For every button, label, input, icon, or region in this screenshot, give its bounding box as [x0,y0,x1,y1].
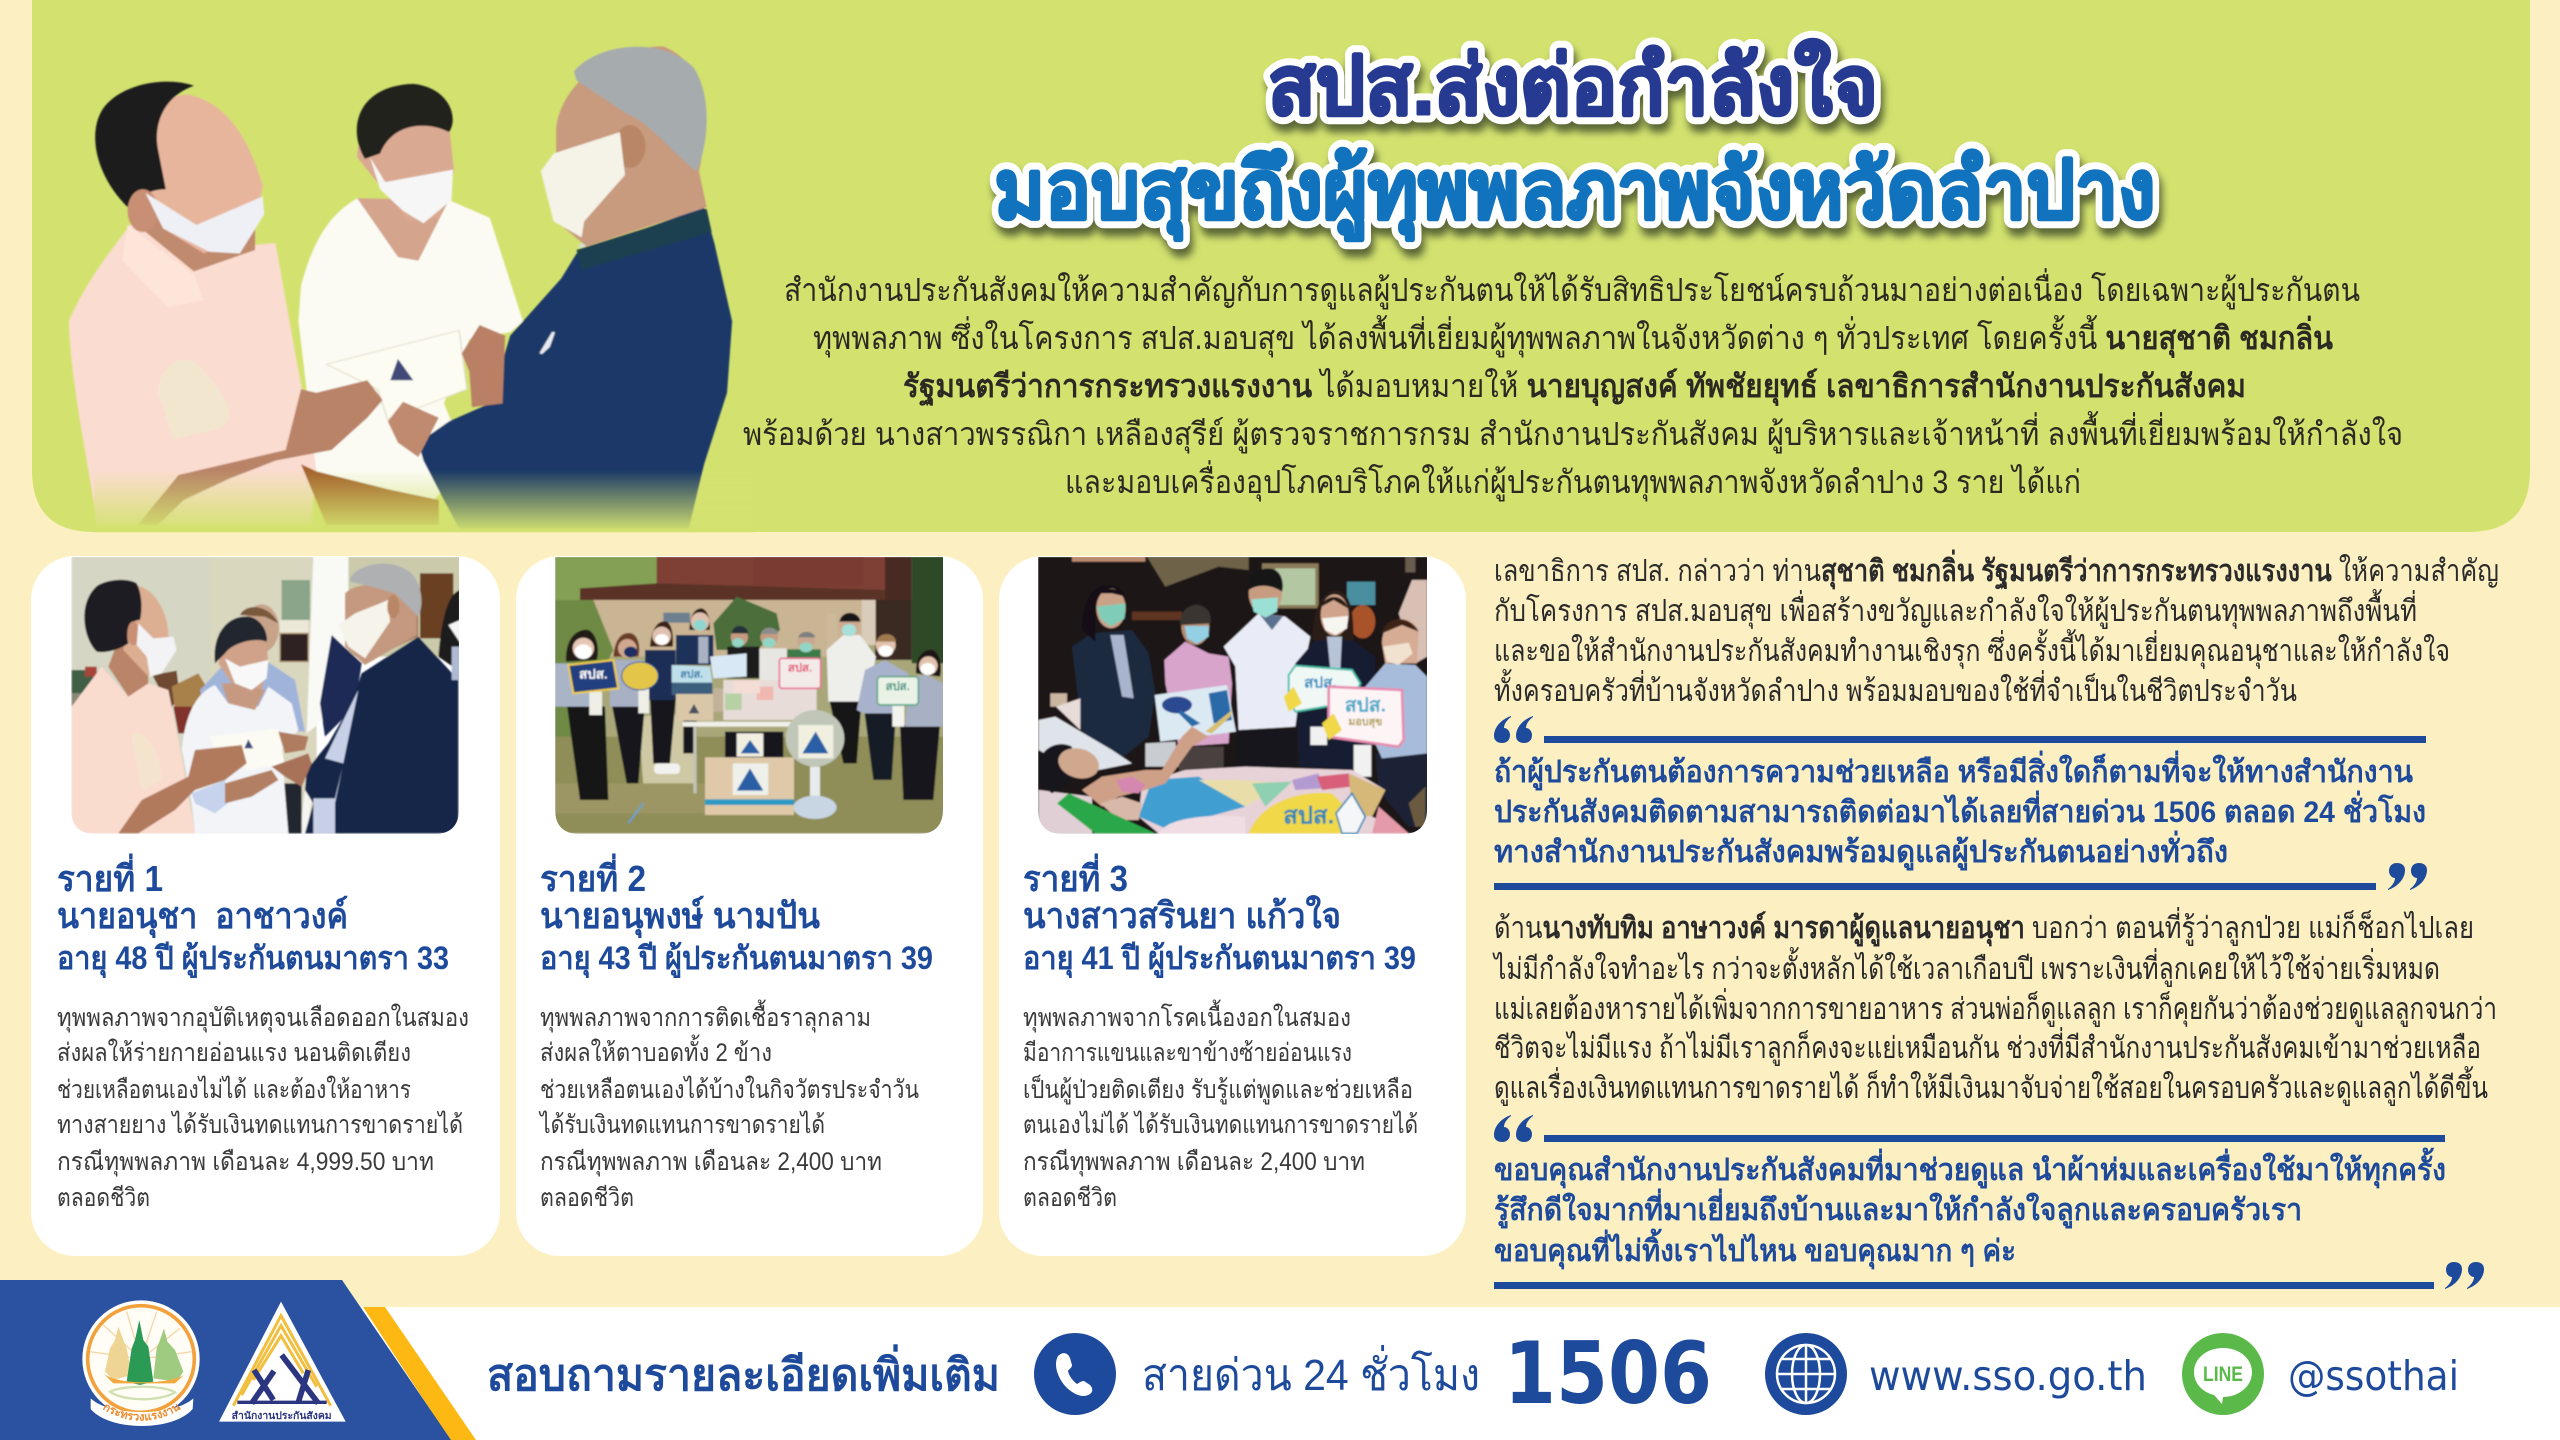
photo: case 2: สปส. [788,662,812,675]
case 3 description: ตลอดชีวิต [1023,1184,1117,1212]
photo: case 2: สปส. [579,666,608,681]
case 3 heading: รายที่ 3 [1023,853,1128,899]
icon: ministry of labour seal [82,1300,200,1426]
case 3 description: มีอาการแขนและขาข้างซ้ายอ่อนแรง [1023,1039,1352,1067]
icon: LINE [2182,1333,2264,1415]
case 2 description: ส่งผลให้ตาบอดทั้ง 2 ข้าง [540,1034,772,1067]
callout: quote 2: ขอบคุณที่ไม่ทิ้งเราไปไหน ขอบคุณมาก ๆ ค่ะ [1494,1228,2016,1270]
icon: ministry of labour seal: กระทรวงแรงงาน [102,1404,181,1421]
case 1 heading: รายที่ 1 [57,853,163,899]
case 2 description: ได้รับเงินทดแทนการขาดรายได้ [538,1110,825,1139]
case 2 heading: อายุ 43 ปี ผู้ประกันตนมาตรา 39 [540,940,933,979]
photo: case 2: สปส. [886,680,910,693]
intro paragraph: รัฐมนตรีว่าการกระทรวงแรงงาน ได้มอบหมายให้ นายบุญสงค์ ทัพชัยยุทธ์ เลขาธิการสำนักงานประกันสังคม [903,368,2246,407]
photo: case 3 [1038,557,1428,833]
intro paragraph [743,268,2403,502]
text block: secretary-general statement: ทั้งครอบครัวที่บ้านจังหวัดลำปาง พร้อมมอบของใช้ที่จำเป็นในชีวิตประจำวัน [1494,669,2297,708]
case 3 description: เป็นผู้ป่วยติดเตียง รับรู้แต่พูดและช่วยเหลือ [1023,1074,1413,1105]
photo: case 3: มอบสุข [1348,716,1382,729]
callout: quote 2 [1494,1115,2484,1289]
case 3 description: ทุพพลภาพจากโรคเนื้องอกในสมอง [1023,999,1351,1033]
case 2 description: ช่วยเหลือตนเองได้บ้างในกิจวัตรประจำวัน [540,1075,919,1104]
photo: case 3: สปส. [1283,802,1334,829]
callout: quote 1 [1494,716,2427,890]
callout: quote 2: รู้สึกดีใจมากที่มาเยี่ยมถึงบ้านและมาให้กำลังใจลูกและครอบครัวเรา [1494,1188,2302,1229]
photo: case 3: สปส. [1345,696,1386,717]
icon: globe [1765,1333,1847,1415]
icon: phone [1034,1333,1116,1415]
photo: case 2 [555,557,945,833]
panel: header [32,0,2530,532]
photo: case 3: สปส. [1304,674,1337,691]
case 2 heading: นายอนุพงษ์ นามปัน [540,895,820,939]
case 1 description [57,1003,469,1212]
case 3 description: ตนเองไม่ได้ ได้รับเงินทดแทนการขาดรายได้ [1023,1110,1418,1139]
hotline number: 1506 [1504,1324,1712,1424]
text block: secretary-general statement [1494,549,2499,708]
case 1 description: กรณีทุพพลภาพ เดือนละ 4,999.50 บาท [57,1148,434,1177]
panel: case 3 [999,556,1466,1256]
text block: secretary-general statement: เลขาธิการ สปส. กล่าวว่า ท่านสุชาติ ชมกลิ่น รัฐมนตรีว่าการกระทรวงแรงงาน ให้ความสำคัญ [1494,549,2499,591]
case 1 description: ทุพพลภาพจากอุบัติเหตุจนเลือดออกในสมอง [57,1003,469,1033]
case 2 description [538,999,919,1212]
title: มอบสุขถึงผู้ทุพพลภาพจังหวัดลำปาง [994,145,2156,241]
case 2 description: ทุพพลภาพจากการติดเชื้อราลุกลาม [540,999,871,1033]
case 1 description: ทางสายยาง ได้รับเงินทดแทนการขาดรายได้ [57,1110,463,1139]
case 3 heading: นางสาวสรินยา แก้วใจ [1023,894,1341,936]
icon: closing quote mark [2445,1262,2484,1289]
intro paragraph: ทุพพลภาพ ซึ่งในโครงการ สปส.มอบสุข ได้ลงพื้นที่เยี่ยมผู้ทุพพลภาพในจังหวัดต่าง ๆ ทั่วประเทศ โดยครั้งนี้ นายสุชาติ ชมกลิ่น [813,315,2333,359]
case 1 heading: นายอนุชา อาชาวงค์ [57,895,348,939]
title: สปส.ส่งต่อกำลังใจ [1268,39,1878,132]
text block: mother statement: ด้านนางทับทิม อาษาวงค์ มารดาผู้ดูแลนายอนุชา บอกว่า ตอนที่รู้ว่าลูกป่วย แม่ก็ช็อกไปเลย [1494,907,2474,947]
title: สปส.ส่งต่อกำลังใจ [1268,39,1878,132]
icon: social security office logo: สำนักงานประกันสังคม [232,1410,332,1422]
case 3 description [1023,999,1418,1212]
callout: quote 1: ประกันสังคมติดตามสามารถติดต่อมาได้เลยที่สายด่วน 1506 ตลอด 24 ชั่วโมง [1494,790,2426,829]
title [994,39,2156,241]
case 3 description: กรณีทุพพลภาพ เดือนละ 2,400 บาท [1023,1148,1365,1177]
contact heading: สอบถามรายละเอียดเพิ่มเติม [487,1344,1000,1400]
photo: case 2: สปส. [680,668,703,680]
case 1 description: ตลอดชีวิต [57,1184,150,1212]
intro paragraph: สำนักงานประกันสังคมให้ความสำคัญกับการดูแลผู้ประกันตนให้ได้รับสิทธิประโยชน์ครบถ้วนมาอย่างต่อเนื่อง โดยเฉพาะผู้ประกันตน [784,268,2360,310]
case 1 heading [57,853,449,979]
footer bar [0,1280,2560,1440]
case 3 heading [1023,853,1416,979]
icon: opening quote mark [1494,1115,1533,1142]
icon: social security office logo [219,1302,346,1422]
callout: quote 2: ขอบคุณสำนักงานประกันสังคมที่มาช่วยดูแล นำผ้าห่มและเครื่องใช้มาให้ทุกครั้ง [1494,1147,2446,1189]
LINE handle: @ssothai [2288,1352,2459,1400]
text block: mother statement [1492,907,2497,1106]
case 2 heading: รายที่ 2 [540,853,646,899]
callout: quote 1: ทางสำนักงานประกันสังคมพร้อมดูแลผู้ประกันตนอย่างทั่วถึง [1494,830,2228,871]
hotline label: สายด่วน 24 ชั่วโมง [1142,1344,1480,1400]
callout: quote 1: ถ้าผู้ประกันตนต้องการความช่วยเหลือ หรือมีสิ่งใดก็ตามที่จะให้ทางสำนักงาน [1494,750,2413,791]
website: www.sso.go.th [1869,1352,2147,1400]
case 3 heading: อายุ 41 ปี ผู้ประกันตนมาตรา 39 [1023,940,1416,979]
title: มอบสุขถึงผู้ทุพพลภาพจังหวัดลำปาง [994,145,2156,241]
case 1 heading: อายุ 48 ปี ผู้ประกันตนมาตรา 33 [57,940,449,979]
text block: secretary-general statement: กับโครงการ สปส.มอบสุข เพื่อสร้างขวัญและกำลังใจให้ผู้ประกันตนทุพพลภาพถึงพื้นที่ [1494,589,2417,630]
icon: LINE: LINE [2203,1363,2243,1386]
intro paragraph: พร้อมด้วย นางสาวพรรณิกา เหลืองสุรีย์ ผู้ตรวจราชการกรม สำนักงานประกันสังคม ผู้บริหารและเจ้าหน้าที่ ลงพื้นที่เยี่ยมพร้อมให้กำลังใจ [743,411,2403,454]
panel: case 1 [31,556,500,1256]
case 2 heading [540,853,933,979]
panel: case 2 [516,556,983,1256]
icon: closing quote mark [2388,863,2427,890]
intro paragraph: และมอบเครื่องอุปโภคบริโภคให้แก่ผู้ประกันตนทุพพลภาพจังหวัดลำปาง 3 ราย ได้แก่ [1065,460,2081,502]
hero photo: officials handing envelope to family [69,46,754,532]
case 1 description: ช่วยเหลือตนเองไม่ได้ และต้องให้อาหาร [57,1075,411,1104]
case 2 description: ตลอดชีวิต [540,1184,634,1212]
case 1 description: ส่งผลให้ร่ายกายอ่อนแรง นอนติดเตียง [57,1038,411,1067]
case 2 description: กรณีทุพพลภาพ เดือนละ 2,400 บาท [540,1148,882,1177]
icon: opening quote mark [1494,716,1533,743]
photo: case 1 [72,557,462,833]
